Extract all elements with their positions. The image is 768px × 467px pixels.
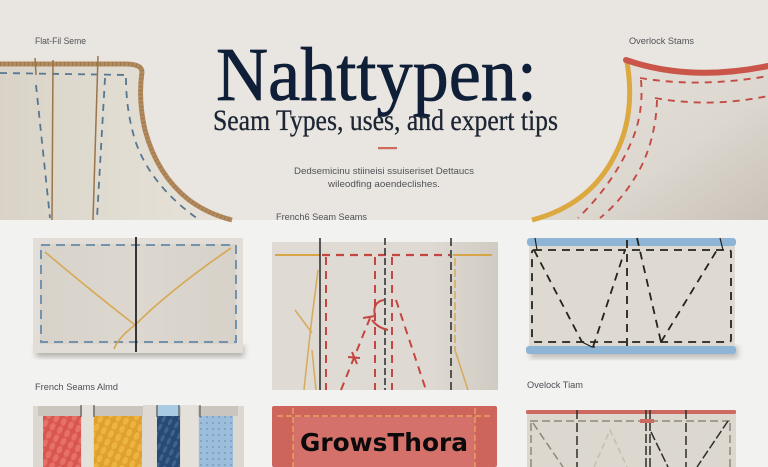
subtitle: Seam Types, uses, and expert tips	[213, 104, 558, 137]
blue dashed border	[41, 245, 236, 342]
panel: blue banded swatch with black stitching	[526, 238, 738, 358]
black stitching	[577, 410, 728, 467]
panel: blue stitched swatch	[33, 237, 244, 357]
red cross stitches and arc	[348, 300, 388, 364]
red stitching	[578, 76, 768, 218]
black vertical seams	[320, 238, 451, 390]
small red tack	[640, 419, 654, 423]
yellow piping edge	[532, 62, 630, 220]
panel: flat-fell seam fabric, top left	[0, 56, 234, 220]
red accent rule	[378, 147, 397, 149]
yellow threads	[295, 258, 468, 390]
brown piping edge	[0, 64, 232, 220]
description text: wileodfing aoendeclishes.	[327, 179, 440, 190]
description text: Dedsemicinu stiineisi ssuiseriset Dettaucs	[294, 166, 474, 177]
woven light blue strip	[199, 416, 233, 467]
label: overlock tiam: Ovelock Tiam	[527, 380, 583, 391]
description text	[294, 166, 474, 190]
woven navy strip	[157, 416, 180, 467]
blue top band	[527, 238, 736, 246]
label: flat-fil seams: Flat-Fil Seme	[35, 36, 86, 46]
horizontal yellow and red stitching	[275, 254, 320, 256]
brown vertical threads	[35, 56, 98, 220]
panel: red brand label swatch	[272, 406, 497, 467]
woven red strip	[43, 416, 81, 467]
brand text: GrowsThora	[300, 428, 468, 457]
label: overlock seams: Overlock Stams	[629, 36, 695, 46]
hero background	[0, 0, 768, 220]
yellow stitching	[277, 408, 490, 467]
woven yellow strip	[94, 416, 142, 467]
panel: red and yellow stitched swatch	[272, 238, 498, 390]
black centre seam	[135, 237, 137, 352]
blue bottom band	[526, 346, 736, 354]
panel: overlock seam fabric, top right	[530, 60, 768, 220]
panel: red banded swatch with mixed stitching	[526, 410, 736, 467]
yellow crossing threads	[45, 248, 231, 349]
blue stitching	[0, 73, 198, 219]
red piping edge	[626, 60, 768, 73]
label: french seams almd: French Seams Almd	[35, 382, 118, 393]
grey dashed stitching	[530, 421, 730, 467]
label: french seam seams: French6 Seam Seams	[276, 212, 367, 223]
black dashed stitching	[532, 238, 731, 350]
pale diagonal stitching	[594, 430, 627, 467]
blue tab above navy strip	[157, 405, 179, 416]
red vertical and diagonal stitching	[326, 257, 426, 390]
red top band	[526, 410, 736, 414]
title: Nahttypen:	[216, 33, 537, 117]
panel: coloured woven swatch	[33, 405, 244, 467]
